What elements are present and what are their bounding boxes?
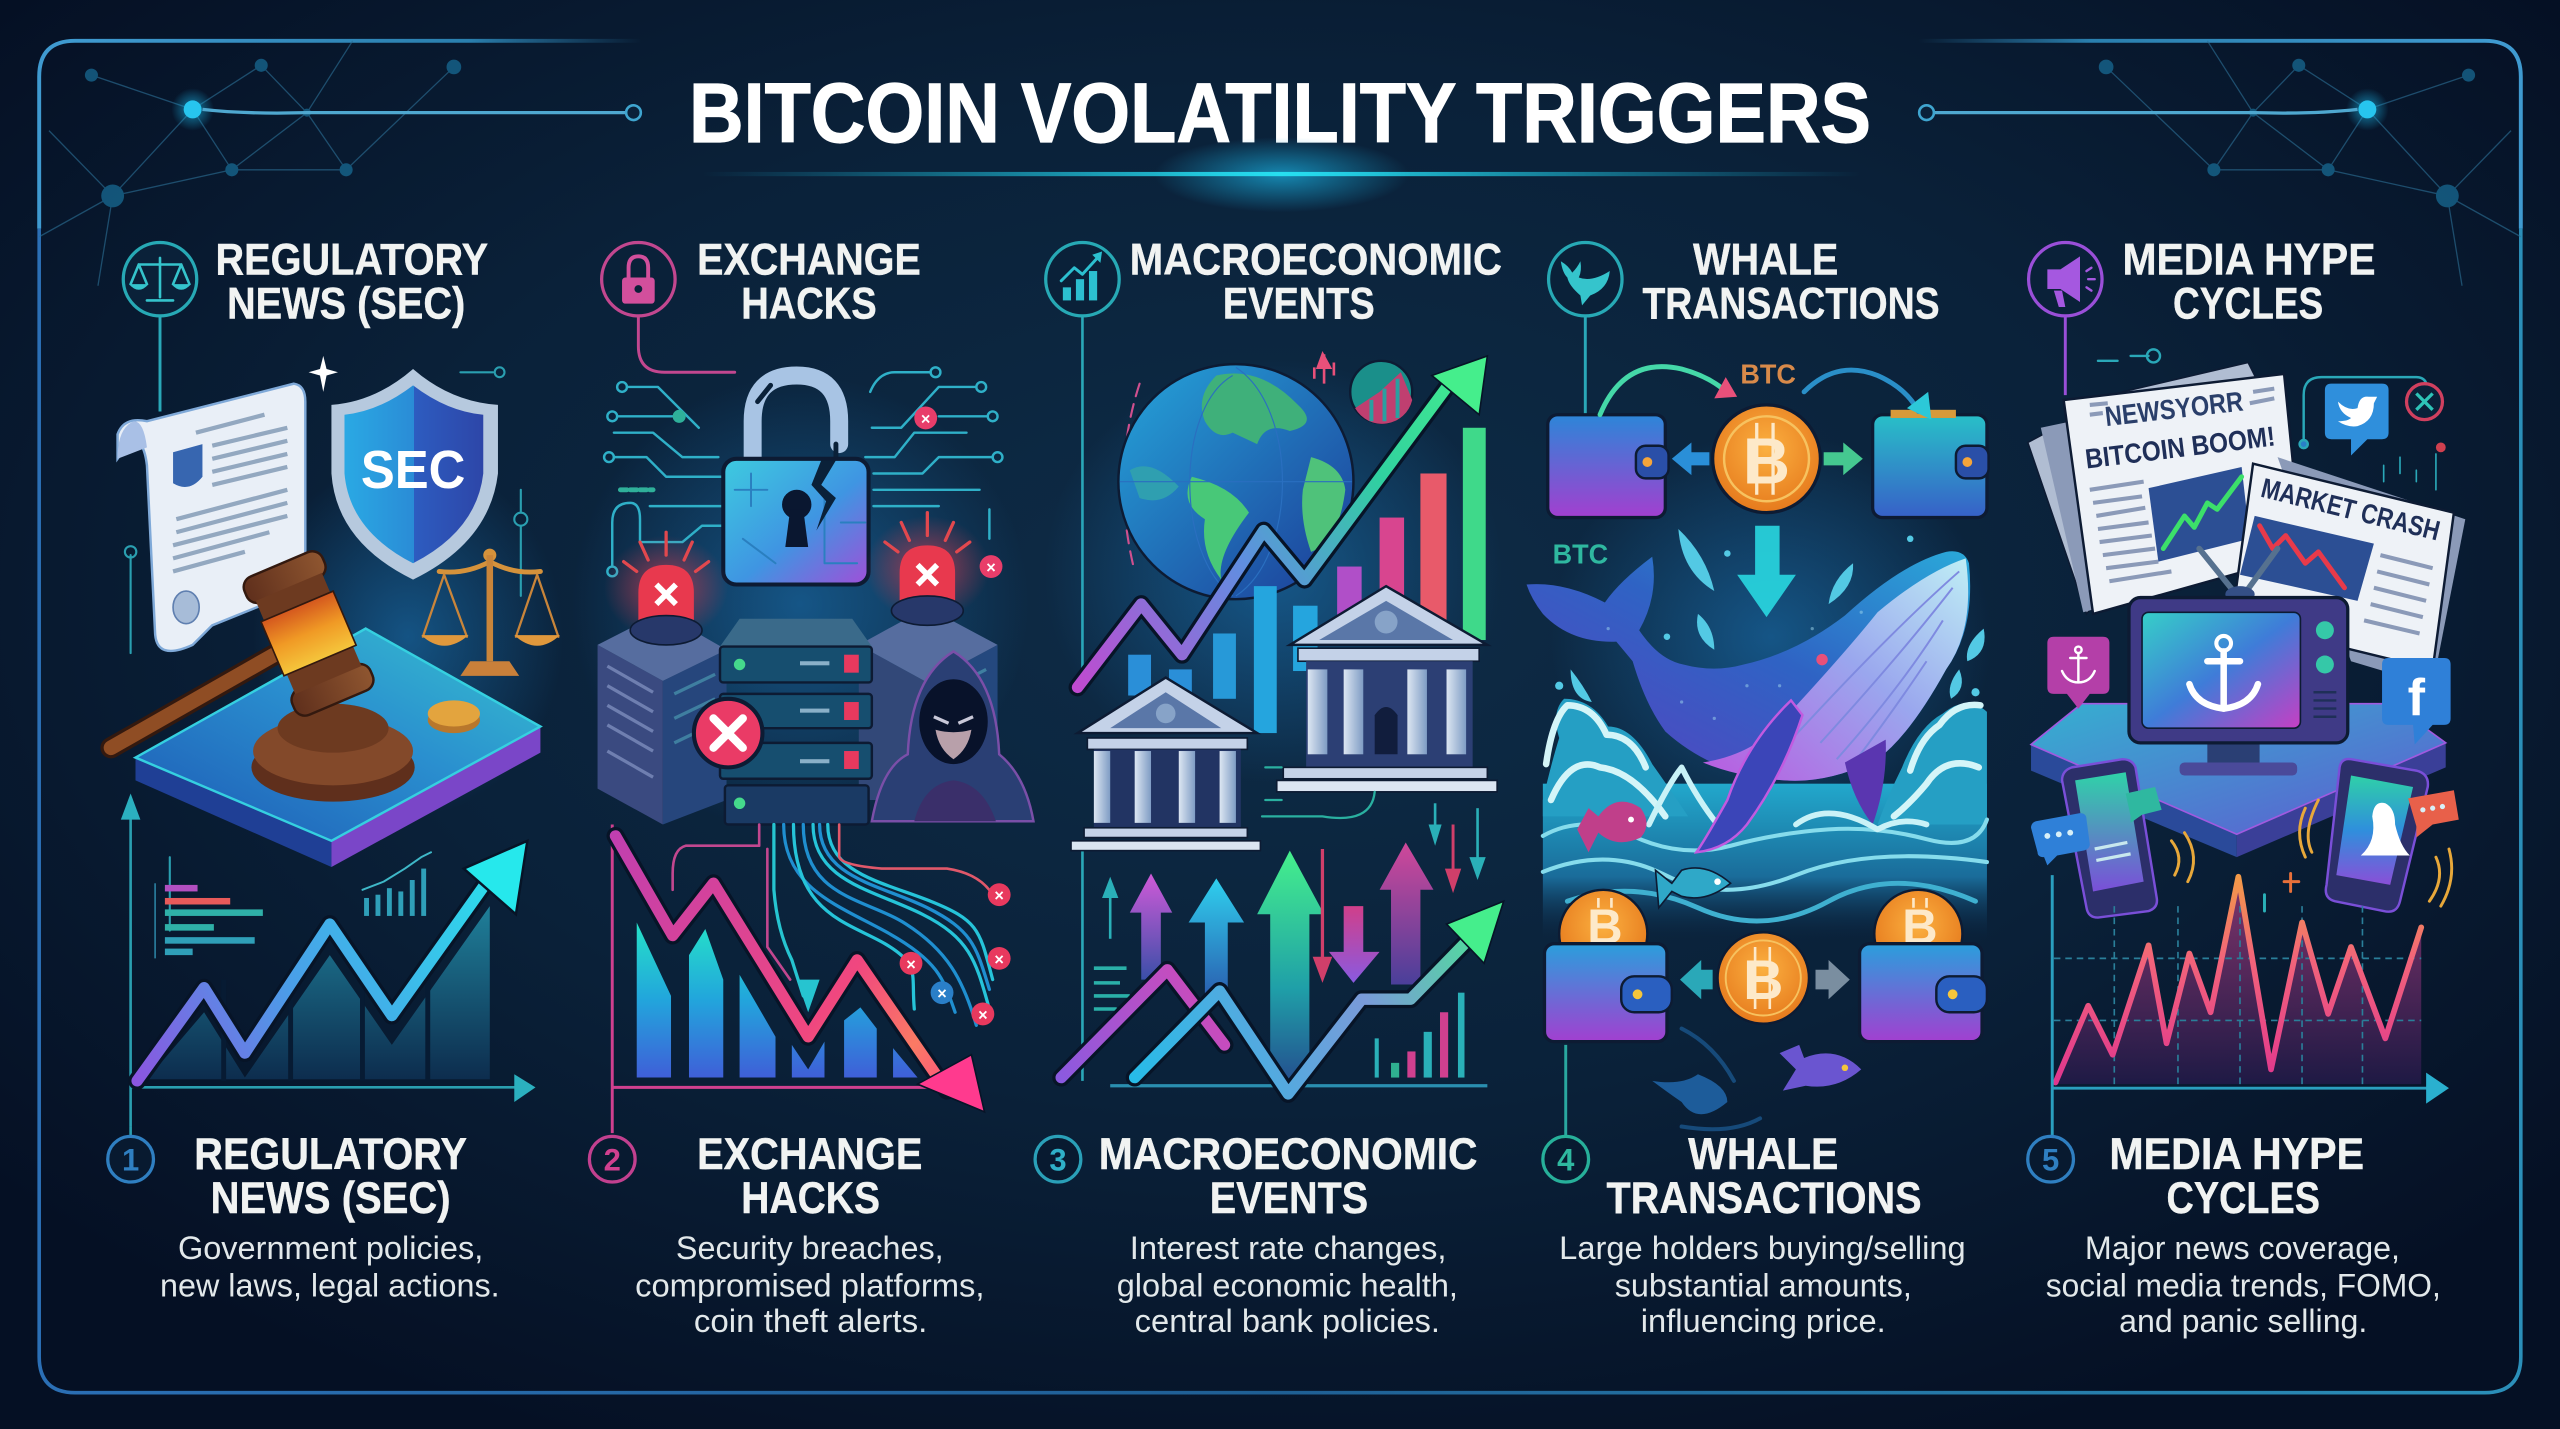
- foam in front of whale: [1649, 767, 1927, 829]
- bars rising: [1128, 428, 1486, 733]
- television: [2129, 549, 2348, 776]
- bubble: twitter: [2325, 384, 2389, 456]
- circuit marks: [125, 367, 527, 931]
- label BTC orange: BTC: [1740, 359, 1796, 390]
- number badge 4: 4: [1557, 1143, 1575, 1178]
- number badge 1: [108, 1127, 153, 1182]
- theft markers: [797, 883, 1011, 1025]
- heading: WHALE: [1693, 235, 1838, 284]
- icon: whale: [1549, 242, 1622, 316]
- bubble: anchor: [2047, 637, 2109, 709]
- connector line: [2064, 317, 2066, 395]
- heading: MEDIA HYPE: [2122, 235, 2376, 284]
- connector line: [159, 317, 161, 411]
- chart: rising line: [121, 793, 536, 1127]
- exchange arrows top: [1672, 442, 1863, 475]
- bank small: [1071, 678, 1375, 851]
- heading: CYCLES: [2173, 279, 2323, 328]
- hacker: [872, 651, 1033, 821]
- icon: padlock: [602, 242, 675, 316]
- theft markers: ×: [994, 951, 1004, 969]
- close circle: [2407, 384, 2442, 420]
- whale: [1527, 551, 1970, 824]
- theft markers: ×: [937, 985, 947, 1003]
- droplets: [1555, 529, 1985, 702]
- bottom heading: EXCHANGE: [697, 1130, 922, 1179]
- number badge 1: 1: [122, 1143, 139, 1178]
- description: social media trends, FOMO,: [2046, 1266, 2441, 1303]
- heading: NEWS (SEC): [227, 279, 465, 328]
- anchor on screen: [2189, 636, 2258, 709]
- panel: regulatory news: [108, 235, 563, 1303]
- number badge 5: 5: [2042, 1143, 2059, 1178]
- platform: [2031, 704, 2446, 857]
- heading: EXCHANGE: [697, 235, 921, 284]
- wallet top left: [1548, 415, 1669, 518]
- arc arrows: [1600, 367, 1931, 420]
- bottom heading: CYCLES: [2167, 1174, 2320, 1223]
- bottom heading: WHALE: [1688, 1130, 1838, 1179]
- coin top: [1713, 405, 1820, 513]
- bottom heading: [697, 1130, 922, 1223]
- heading: MACROECONOMIC: [1130, 235, 1502, 284]
- glow: [1045, 359, 1502, 784]
- wallet bottom right: [1860, 944, 1987, 1042]
- red alert dots: [673, 407, 1002, 578]
- globe: [1118, 364, 1353, 599]
- icon: megaphone: [2029, 242, 2102, 316]
- description: new laws, legal actions.: [160, 1266, 500, 1303]
- heading: TRANSACTIONS: [1642, 279, 1940, 328]
- exchange arrows bottom: [1680, 960, 1850, 999]
- panel: whale transactions: [1527, 235, 1992, 1339]
- number badge 3: 3: [1049, 1143, 1067, 1178]
- water: [1543, 699, 1987, 939]
- broken padlock: [723, 376, 869, 584]
- description: [160, 1229, 500, 1303]
- heading: [697, 235, 921, 328]
- wallet top right: [1873, 410, 1989, 518]
- alarm right: [865, 513, 989, 625]
- coins behind wallets: [1559, 890, 1962, 978]
- coin bottom: B: [1743, 949, 1783, 1011]
- description: compromised platforms,: [635, 1266, 984, 1303]
- newspaper: bitcoin boom: [2028, 362, 2302, 614]
- bank large: [1277, 586, 1497, 792]
- description: Interest rate changes,: [1130, 1229, 1447, 1266]
- fish teal: [1656, 868, 1731, 908]
- server stack: [694, 619, 872, 824]
- description: Major news coverage,: [2085, 1229, 2400, 1266]
- fish purple and shadow: [1652, 1029, 1861, 1129]
- panel: exchange hacks: [571, 235, 1033, 1339]
- description: substantial amounts,: [1615, 1266, 1912, 1303]
- bottom heading: [194, 1130, 467, 1223]
- bottom heading: [1607, 1130, 1922, 1223]
- server right: [859, 607, 998, 816]
- illustration: glow: [253, 457, 563, 816]
- heading: [2122, 235, 2376, 328]
- phone right: [2326, 759, 2428, 912]
- whale flipper: [1696, 700, 1802, 852]
- connector line: [638, 317, 735, 372]
- bubble: facebook: [2382, 658, 2451, 744]
- arrow rising: [1078, 356, 1487, 687]
- chat bubbles: [2031, 787, 2459, 865]
- newspaper: bitcoin boom: NEWSYORR: [2103, 386, 2245, 432]
- mini pie chart: [1314, 351, 1412, 424]
- bottom heading: [2109, 1130, 2364, 1223]
- circuit traces: [604, 367, 1002, 576]
- icon: growth chart: [1046, 242, 1119, 316]
- theft markers: ×: [978, 1006, 988, 1024]
- description: Security breaches,: [676, 1229, 944, 1266]
- icon: scales: [123, 242, 197, 316]
- theft markers: ×: [906, 956, 916, 974]
- vibration marks: [2171, 800, 2452, 911]
- title connector right: [1919, 88, 2389, 131]
- description: global economic health,: [1117, 1266, 1458, 1303]
- glow: [1551, 433, 1992, 841]
- scales of justice: [421, 549, 560, 676]
- bottom heading: [1099, 1130, 1478, 1223]
- heading: EVENTS: [1223, 279, 1375, 328]
- heading: [1642, 235, 1940, 328]
- server left: [598, 612, 727, 824]
- chart: hype spikes: [2052, 875, 2449, 1136]
- wallet bottom left: [1544, 944, 1672, 1042]
- red alert dots: ×: [986, 559, 996, 577]
- shield: SEC: [361, 440, 465, 500]
- bottom heading: EVENTS: [1210, 1174, 1368, 1223]
- title connector left: [171, 88, 641, 131]
- mini bars: [155, 852, 431, 958]
- connector line: [1584, 317, 1586, 415]
- chart: falling line: [612, 824, 984, 1133]
- phone left: [2062, 759, 2157, 918]
- coins behind wallets: B: [1587, 901, 1623, 955]
- description: Large holders buying/selling: [1559, 1229, 1966, 1266]
- newspaper: market crash: [2232, 457, 2465, 686]
- heading: HACKS: [741, 279, 877, 328]
- coins behind wallets: B: [1902, 901, 1938, 955]
- scroll document: [118, 384, 305, 651]
- network decoration right: [2099, 41, 2521, 286]
- icon: sparkle: [309, 356, 338, 392]
- alarm left: [604, 532, 728, 645]
- bottom heading: NEWS (SEC): [211, 1174, 451, 1223]
- title: BITCOIN VOLATILITY TRIGGERS: [689, 65, 1871, 160]
- description: central bank policies.: [1135, 1302, 1440, 1339]
- bottom heading: TRANSACTIONS: [1607, 1174, 1922, 1223]
- panel: macroeconomic events: [1035, 235, 1504, 1339]
- connector line lower: [1565, 1045, 1567, 1136]
- bottom heading: HACKS: [741, 1174, 880, 1223]
- panel: media hype cycles: [2028, 235, 2465, 1339]
- description: [2046, 1229, 2441, 1339]
- heading: [1130, 235, 1502, 328]
- down arrow: [1737, 526, 1796, 617]
- description: [1117, 1229, 1458, 1339]
- number badge 4: [1543, 1136, 1589, 1182]
- description: [1559, 1229, 1966, 1339]
- description: influencing price.: [1641, 1302, 1886, 1339]
- bottom heading: REGULATORY: [194, 1130, 467, 1179]
- number badge 3: [1035, 1136, 1081, 1182]
- up and down arrows: [1094, 803, 1486, 1081]
- description: [635, 1229, 984, 1339]
- bottom heading: MEDIA HYPE: [2109, 1130, 2364, 1179]
- number badge 5: [2028, 1136, 2073, 1182]
- data streams: [673, 824, 993, 1025]
- bubble: facebook: f: [2408, 669, 2426, 727]
- glow: [571, 376, 1029, 833]
- red alert dots: ×: [921, 410, 930, 428]
- title underline: [702, 137, 1861, 212]
- heading: REGULATORY: [216, 235, 488, 284]
- description: and panic selling.: [2119, 1302, 2367, 1339]
- connector line: [1081, 317, 1083, 1081]
- bottom heading: MACROECONOMIC: [1099, 1130, 1478, 1179]
- number badge 2: 2: [604, 1143, 621, 1178]
- number badge 2: [589, 1136, 635, 1182]
- description: coin theft alerts.: [694, 1302, 927, 1339]
- small marks: [2098, 349, 2446, 490]
- newspaper: bitcoin boom: BITCOIN BOOM!: [2083, 420, 2277, 475]
- theft markers: ×: [994, 887, 1004, 905]
- shield: [331, 369, 498, 580]
- label BTC green: BTC: [1553, 538, 1608, 569]
- description: Government policies,: [178, 1229, 483, 1266]
- network decoration left: [39, 41, 461, 286]
- heading: [216, 235, 488, 328]
- fish pink: [1577, 802, 1647, 852]
- gavel: [111, 548, 480, 802]
- newspaper: market crash: MARKET CRASH: [2258, 472, 2443, 546]
- coin bottom: [1718, 932, 1809, 1024]
- coin top: B: [1743, 424, 1790, 497]
- platform: [136, 629, 540, 867]
- chart: volatile arrow: [1061, 901, 1504, 1094]
